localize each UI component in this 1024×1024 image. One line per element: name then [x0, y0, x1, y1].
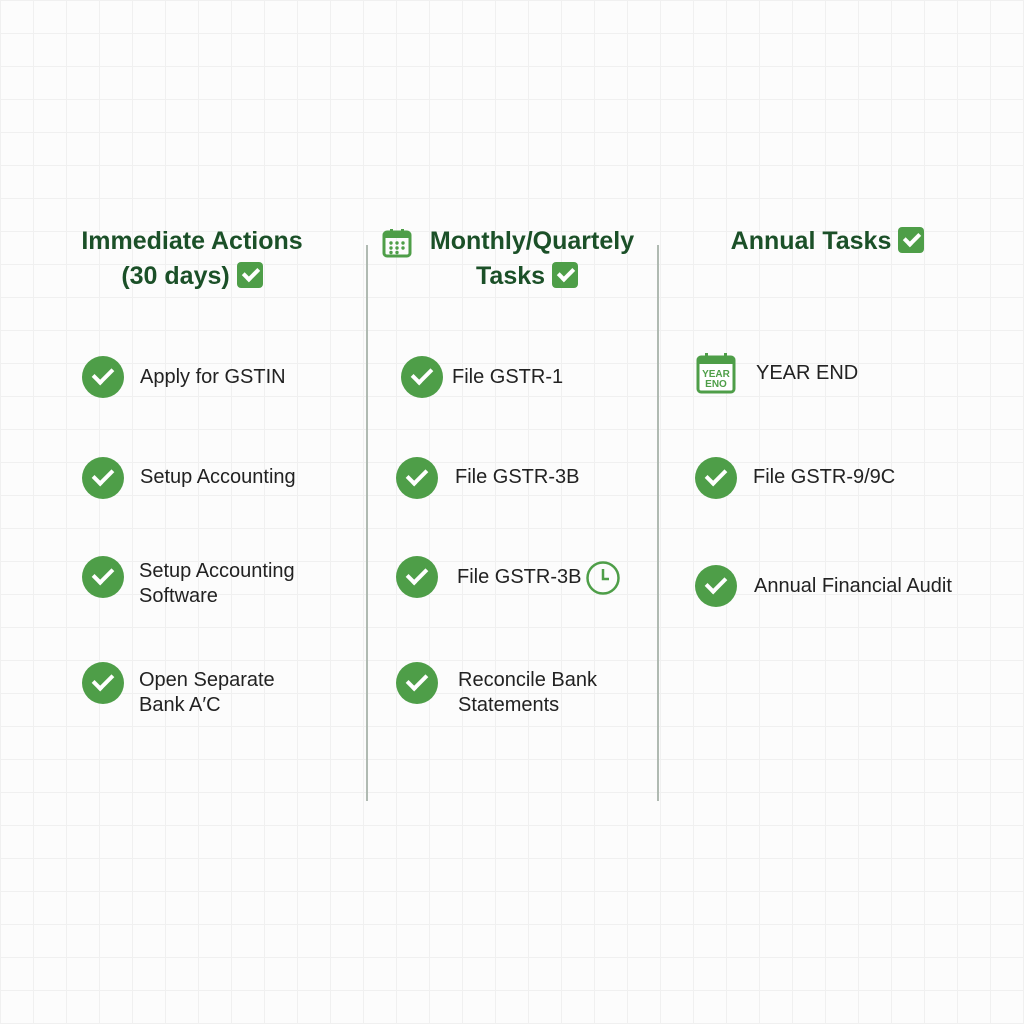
text: Bank A′C	[139, 694, 221, 716]
text: Setup Accounting	[140, 466, 296, 488]
icon: year end calendar	[696, 353, 736, 394]
heading: annual: Annual Tasks	[731, 227, 891, 255]
heading: monthly/quarterly: Tasks	[476, 262, 545, 290]
item: file GSTR-1	[401, 356, 443, 398]
text: File GSTR-9/9C	[753, 466, 895, 488]
text: Software	[139, 585, 218, 607]
item: file GSTR-9	[695, 457, 737, 499]
icon: year end calendar: ENO	[705, 379, 727, 390]
item: reconcile	[396, 662, 438, 704]
icon: calendar	[382, 229, 412, 258]
item: apply for GSTIN	[82, 356, 124, 398]
heading: monthly/quarterly	[382, 227, 634, 290]
text: File GSTR-1	[452, 366, 563, 388]
text: Apply for GSTIN	[140, 366, 286, 388]
text: Reconcile Bank	[458, 669, 597, 691]
item: annual audit	[695, 565, 737, 607]
text: File GSTR-3B	[455, 466, 579, 488]
text: Annual Financial Audit	[754, 575, 952, 597]
item: file GSTR-3B with clock	[396, 556, 438, 598]
heading: immediate actions: (30 days)	[121, 262, 230, 290]
item: setup accounting	[82, 457, 124, 499]
icon: year end calendar: YEAR	[702, 369, 731, 380]
text: Statements	[458, 694, 559, 716]
item: file GSTR-3B	[396, 457, 438, 499]
text: File GSTR-3B	[457, 566, 581, 588]
text: Setup Accounting	[139, 560, 295, 582]
heading: immediate actions	[81, 227, 303, 290]
icon: clock	[586, 561, 620, 595]
item: year end: YEAR END	[756, 362, 858, 384]
heading: monthly/quarterly: Monthly/Quartely	[430, 227, 634, 255]
item: setup accounting software	[82, 556, 124, 598]
text: Open Separate	[139, 669, 275, 691]
heading: immediate actions: Immediate Actions	[81, 227, 303, 255]
item: open separate bank	[82, 662, 124, 704]
